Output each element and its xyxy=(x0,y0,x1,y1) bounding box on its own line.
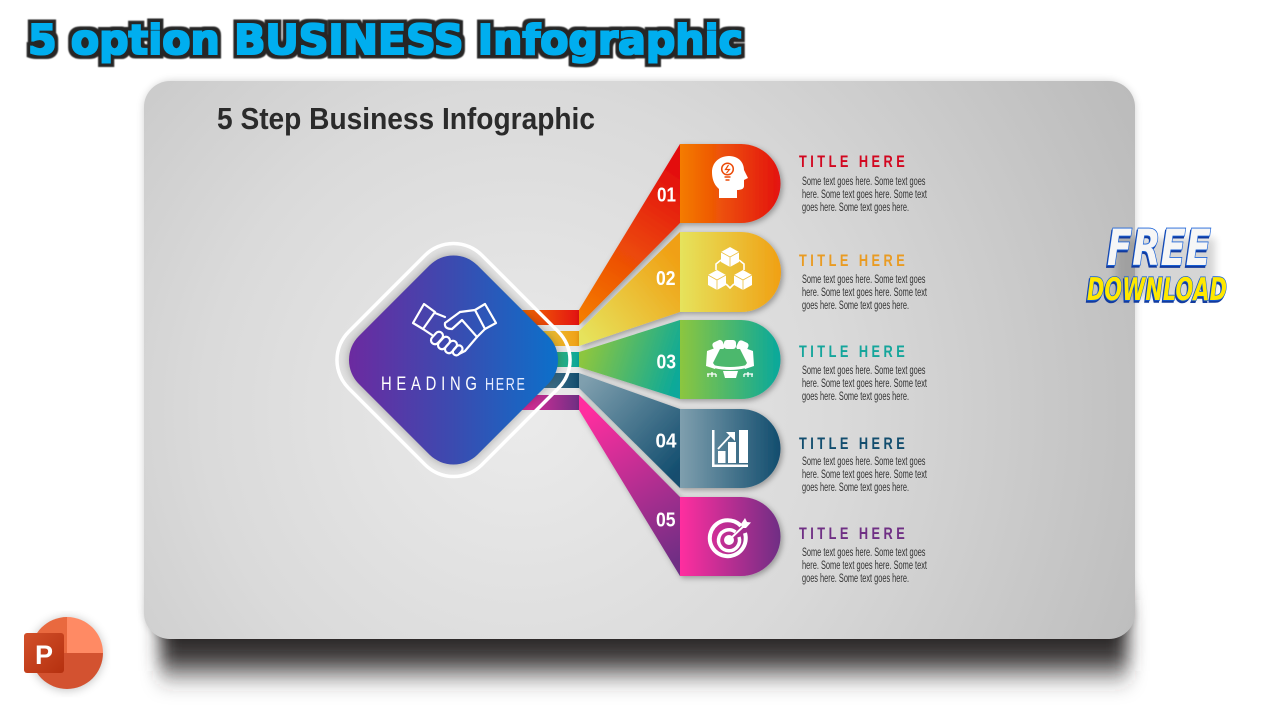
step 01 text: here. Some text goes here. Some text xyxy=(802,189,928,201)
icon: powerpoint logo xyxy=(24,617,103,690)
slide heading: 5 Step Business Infographic xyxy=(217,101,595,136)
step 01 text: goes here. Some text goes here. xyxy=(802,202,909,214)
icon: target with arrow xyxy=(710,518,751,556)
step 01 text xyxy=(799,152,928,214)
slide panel with drop shadow xyxy=(144,81,1135,671)
step 03 shape xyxy=(579,320,781,399)
step 01 text: Some text goes here. Some text goes xyxy=(802,176,926,188)
step 02 text: goes here. Some text goes here. xyxy=(802,300,909,312)
step 04 text xyxy=(799,434,928,494)
free download badge xyxy=(1087,219,1227,308)
step 03 text: goes here. Some text goes here. xyxy=(802,391,909,403)
connector strips xyxy=(510,310,579,410)
icon: connected cubes xyxy=(708,247,752,290)
step 05 text: TITLE HERE xyxy=(799,524,905,544)
step numbers: 03 xyxy=(656,350,676,374)
step 05 text: Some text goes here. Some text goes xyxy=(802,547,926,559)
step 03 text: TITLE HERE xyxy=(799,342,905,362)
main title: 5 option BUSINESS Infographic xyxy=(28,16,743,64)
heading here xyxy=(381,373,525,395)
step 05 text: here. Some text goes here. Some text xyxy=(802,560,928,572)
step numbers: 02 xyxy=(656,267,676,290)
icon: head with lightbulb xyxy=(712,156,748,198)
heading here: HEADING xyxy=(381,373,477,394)
step 01 text: TITLE HERE xyxy=(799,152,905,172)
step 02 shape xyxy=(579,232,781,346)
step 01 shape xyxy=(579,144,781,325)
heading here: HERE xyxy=(485,375,525,395)
step 02 text xyxy=(799,251,928,312)
icon: powerpoint logo: P xyxy=(35,640,53,670)
step 05 text: goes here. Some text goes here. xyxy=(802,573,909,585)
step numbers: 04 xyxy=(656,430,677,452)
step 04 text: goes here. Some text goes here. xyxy=(802,482,909,494)
step 05 shape xyxy=(579,395,781,576)
step 02 text: TITLE HERE xyxy=(799,251,905,271)
icon: handshake xyxy=(413,304,496,357)
step 04 text: here. Some text goes here. Some text xyxy=(802,469,928,481)
central diamond xyxy=(337,243,570,477)
step 02 text: here. Some text goes here. Some text xyxy=(802,287,928,299)
step 02 text: Some text goes here. Some text goes xyxy=(802,274,926,286)
step numbers: 01 xyxy=(657,184,676,206)
step 04 text: TITLE HERE xyxy=(799,434,905,454)
step 05 text xyxy=(799,524,928,585)
icon: rising bar chart xyxy=(712,430,748,467)
step numbers: 05 xyxy=(656,508,676,532)
free download badge: FREE xyxy=(1107,219,1211,277)
step 03 text: here. Some text goes here. Some text xyxy=(802,378,928,390)
step 04 text: Some text goes here. Some text goes xyxy=(802,456,926,468)
icon: meeting table xyxy=(706,339,754,378)
step 03 text xyxy=(799,342,928,403)
step 04 shape xyxy=(579,373,781,488)
step numbers xyxy=(656,184,677,532)
step 03 text: Some text goes here. Some text goes xyxy=(802,365,926,377)
